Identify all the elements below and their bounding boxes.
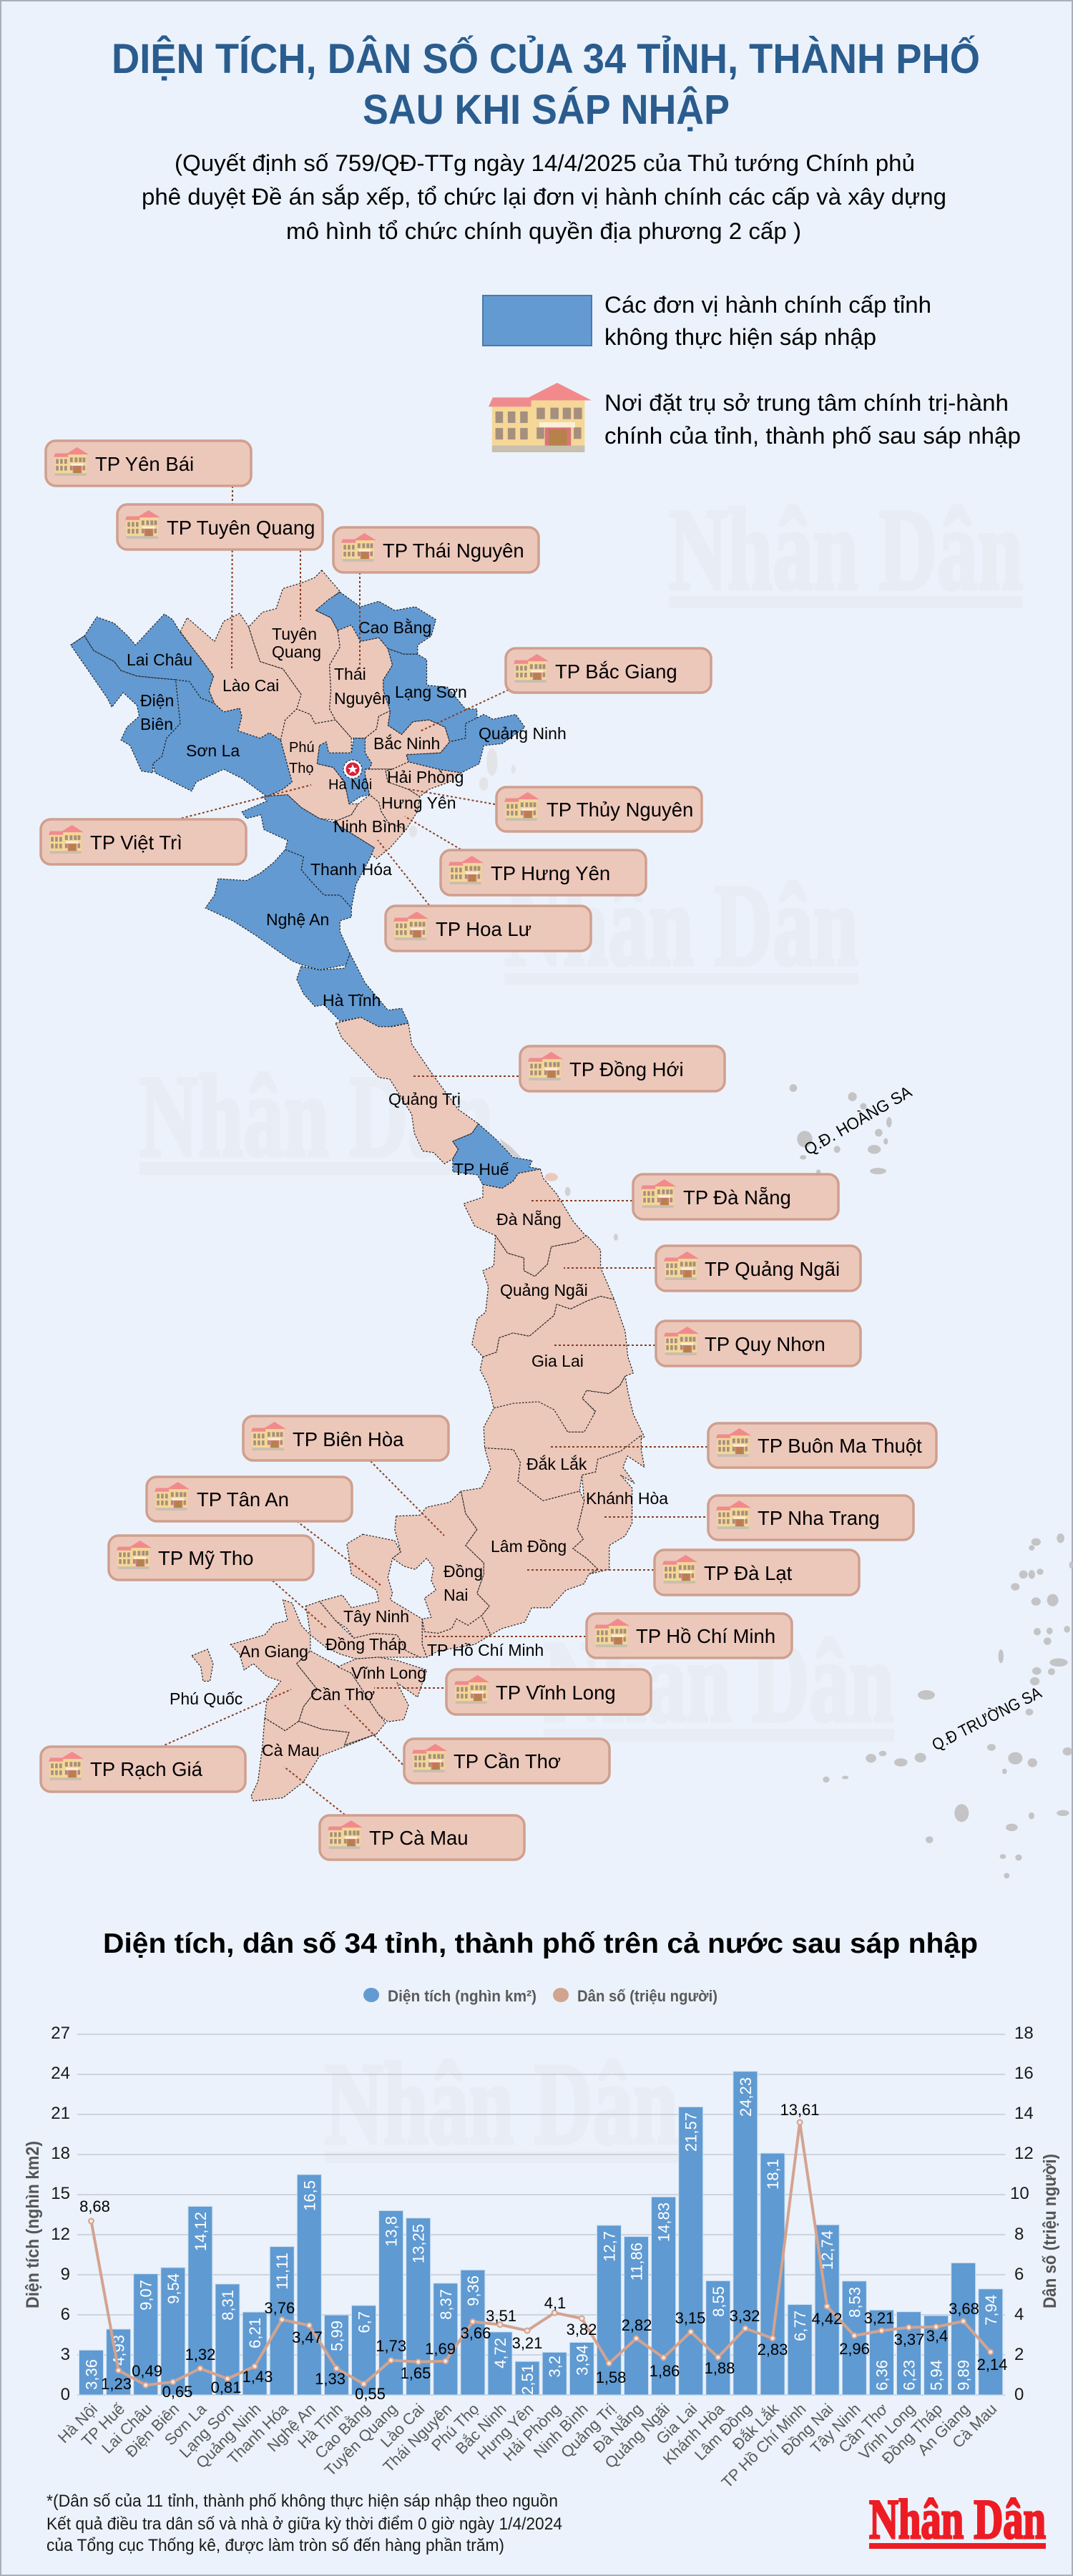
- callout: TP Biên Hòa: [243, 1416, 449, 1460]
- footnote: của Tổng cục Thống kê, được làm tròn số đến hàng phần trăm): [46, 2536, 504, 2555]
- island shading: Quảng Ninh: [409, 748, 516, 837]
- left axis ticks: 9: [61, 2265, 70, 2284]
- bar value labels: 14,83: [655, 2202, 673, 2242]
- watermarks: [139, 485, 1023, 2169]
- x axis labels: Lâm Đồng: [691, 2400, 755, 2464]
- callout: TP Hoa Lư: [386, 906, 591, 951]
- callout: TP Cà Mau: TP Cà Mau: [369, 1827, 469, 1849]
- x axis labels: Điện Biên: [122, 2400, 182, 2461]
- legend swatch: unmerged province: [483, 296, 592, 346]
- legend text: administrative centre: chính của tỉnh, thành phố sau sáp nhập: [604, 423, 1021, 449]
- population value labels: 3,21: [512, 2334, 542, 2352]
- callout: TP Quy Nhơn: [656, 1321, 861, 1366]
- map province labels: Khánh Hòa: [586, 1489, 668, 1508]
- left axis ticks: 18: [51, 2144, 70, 2163]
- map province labels: Tây Ninh: [343, 1607, 409, 1626]
- map province labels: Nghệ An: [266, 910, 329, 929]
- map province labels: Thanh Hóa: [310, 860, 392, 879]
- x axis labels: Hà Tĩnh: [294, 2400, 346, 2452]
- callout: TP Cà Mau: [320, 1815, 524, 1860]
- map province labels: Lai Châu: [127, 650, 192, 669]
- map: southern provinces: [192, 1376, 645, 1801]
- left axis ticks: [51, 2024, 70, 2404]
- callout: TP Yên Bái: TP Yên Bái: [95, 453, 194, 475]
- map province labels: Đà Nẵng: [496, 1209, 562, 1229]
- map: central provinces: [335, 1018, 633, 1432]
- x axis labels: Gia Lai: [652, 2400, 700, 2448]
- map province labels: Đồng: [444, 1562, 483, 1581]
- leader line: TP Thái Nguyên: [359, 572, 361, 669]
- legend text: unmerged province: [604, 292, 931, 350]
- callout: TP Rạch Giá: TP Rạch Giá: [90, 1758, 203, 1780]
- watermarks: Nhân Dân: [139, 1052, 494, 1181]
- callout: TP Thái Nguyên: TP Thái Nguyên: [383, 540, 524, 562]
- x axis labels: Ninh Bình: [530, 2400, 592, 2462]
- leader line: TP Quảng Ngãi: [564, 1267, 655, 1269]
- population value labels: 1,23: [101, 2375, 132, 2393]
- callout: TP Hưng Yên: TP Hưng Yên: [491, 862, 610, 884]
- population value labels: 3,47: [292, 2328, 323, 2346]
- leader line: TP Đà Lạt: [525, 1569, 654, 1571]
- legend text: administrative centre: [604, 390, 1021, 449]
- left axis title: Diện tích (nghìn km2): [23, 2141, 43, 2308]
- right axis ticks: 12: [1014, 2144, 1034, 2163]
- bar value labels: 24,23: [737, 2077, 755, 2117]
- callout: TP Mỹ Tho: [109, 1536, 313, 1580]
- callout: TP Hưng Yên: [441, 850, 646, 895]
- population value labels: 3,66: [461, 2324, 491, 2342]
- map province labels: Quảng Trị: [388, 1090, 461, 1108]
- right axis title: Dân số (triệu người): [1040, 2154, 1060, 2308]
- x axis labels: Thái Nguyên: [379, 2400, 455, 2476]
- map province labels: Sơn La: [186, 741, 240, 760]
- callout: TP Quảng Ngãi: TP Quảng Ngãi: [705, 1258, 840, 1280]
- callout: TP Mỹ Tho: TP Mỹ Tho: [158, 1547, 253, 1569]
- map province labels: Tuyên: [272, 625, 317, 643]
- map province labels: Lâm Đồng: [491, 1537, 567, 1556]
- subtitle: phê duyệt Đề án sắp xếp, tổ chức lại đơn vị hành chính các cấp và xây dựng: [142, 184, 946, 210]
- callout: TP Nha Trang: TP Nha Trang: [758, 1507, 880, 1529]
- map province labels: Hà Tĩnh: [323, 991, 381, 1010]
- watermarks: Nhân Dân: [504, 861, 858, 990]
- x axis labels: Quảng Ninh: [192, 2400, 265, 2472]
- map province labels: Biên: [140, 715, 173, 733]
- callout: TP Buôn Ma Thuột: [708, 1423, 936, 1468]
- leader line: TP Việt Trì: [177, 785, 311, 819]
- population value labels: 1,32: [185, 2346, 215, 2363]
- label: Q.Đ Trường Sa: Q.Đ TRƯỜNG SA: [929, 1683, 1044, 1754]
- right axis ticks: 2: [1014, 2345, 1024, 2364]
- map province labels: Quảng Ngãi: [500, 1281, 588, 1299]
- callout: TP Nha Trang: [708, 1496, 913, 1540]
- population value labels: 3,82: [567, 2321, 597, 2338]
- chart legend: [363, 1987, 717, 2005]
- bar value labels: 6,21: [246, 2318, 264, 2348]
- population value labels: 2,82: [622, 2316, 652, 2334]
- population value labels: 1,65: [401, 2364, 431, 2382]
- map province labels: Phú: [289, 740, 315, 756]
- bar value labels: 7,94: [982, 2295, 1000, 2326]
- title: SAU KHI SÁP NHẬP: [363, 87, 730, 133]
- bar value labels: 9,07: [137, 2280, 155, 2311]
- right axis ticks: 14: [1014, 2104, 1034, 2123]
- bar value labels: 9,89: [955, 2360, 973, 2391]
- islands near central coast: [499, 1138, 618, 1241]
- bar value labels: 14,12: [192, 2212, 210, 2251]
- population value labels: 3,37: [894, 2331, 924, 2348]
- population value labels: 3,15: [675, 2309, 705, 2327]
- bar value labels: 6,36: [873, 2360, 891, 2391]
- line markers: [89, 2119, 993, 2388]
- map province labels: Hà Nội: [328, 777, 372, 793]
- map province labels: Nguyên: [334, 689, 391, 708]
- x axis labels: Hải Phòng: [499, 2400, 564, 2464]
- x axis labels: Lạng Sơn: [176, 2400, 237, 2462]
- leader line: TP Đồng Hới: [413, 1075, 519, 1077]
- left axis ticks: 12: [51, 2225, 70, 2244]
- legend text: unmerged province: không thực hiện sáp nhập: [604, 324, 876, 350]
- x axis labels: Đồng Tháp: [878, 2400, 946, 2467]
- bar value labels: 12,7: [600, 2231, 618, 2262]
- bar value labels: 6,7: [355, 2311, 373, 2333]
- leader line: TP Cần Thơ: [345, 1705, 403, 1765]
- subtitle: mô hình tổ chức chính quyền địa phương 2 cấp ): [286, 218, 801, 244]
- leader line: TP Nha Trang: [603, 1516, 705, 1518]
- chart legend: Dân số (triệu người): [577, 1987, 717, 2005]
- map: northern provinces: [71, 570, 525, 1027]
- right axis ticks: [1010, 2024, 1034, 2404]
- callout: TP Yên Bái: [46, 441, 251, 486]
- bar value labels: 12,74: [818, 2230, 836, 2270]
- right axis ticks: 6: [1014, 2265, 1024, 2284]
- left axis ticks: 15: [51, 2184, 70, 2203]
- right axis ticks: 10: [1010, 2184, 1029, 2203]
- population value labels: 0,49: [132, 2362, 162, 2380]
- population value labels: 8,68: [79, 2197, 110, 2215]
- callout: TP Buôn Ma Thuột: TP Buôn Ma Thuột: [758, 1435, 922, 1457]
- population value labels: 1,33: [315, 2370, 346, 2388]
- map province labels: Phú Quốc: [170, 1689, 242, 1708]
- callout: TP Hoa Lư: TP Hoa Lư: [436, 918, 531, 940]
- callout: TP Hồ Chí Minh: [587, 1614, 792, 1658]
- population value labels: 0,65: [162, 2383, 192, 2401]
- leader line: TP Biên Hòa: [371, 1461, 444, 1536]
- leader line: TP Buôn Ma Thuột: [549, 1446, 707, 1448]
- callout: TP Tân An: [147, 1477, 352, 1521]
- x axis labels: TP Hồ Chí Minh: [718, 2400, 810, 2492]
- watermarks: Nhân Dân: [325, 2039, 678, 2169]
- x axis labels: Thanh Hóa: [224, 2399, 292, 2468]
- population value labels: 1,88: [705, 2359, 735, 2377]
- callout: TP Đà Lạt: [655, 1550, 859, 1595]
- leader line: TP Rạch Giá: [161, 1689, 291, 1747]
- x axis labels: An Giang: [914, 2400, 973, 2459]
- callout: TP Đà Nẵng: TP Đà Nẵng: [683, 1186, 791, 1209]
- title: [112, 36, 980, 133]
- population value labels: 1,69: [425, 2340, 456, 2358]
- line: population: [92, 2122, 991, 2385]
- callout: TP Quy Nhơn: TP Quy Nhơn: [705, 1333, 825, 1355]
- legend text: unmerged province: Các đơn vị hành chính cấp tỉnh: [604, 292, 931, 318]
- x axis labels: Cao Bằng: [311, 2400, 373, 2462]
- subtitle: (Quyết định số 759/QĐ-TTg ngày 14/4/2025 của Thủ tướng Chính phủ: [175, 150, 915, 176]
- bar value labels: 13,25: [410, 2224, 428, 2263]
- x axis labels: Vĩnh Long: [855, 2400, 918, 2463]
- callout: TP Vĩnh Long: [446, 1669, 651, 1714]
- x axis labels: Lào Cai: [377, 2400, 428, 2451]
- map province labels: Đồng Tháp: [325, 1635, 406, 1654]
- x axis labels: Cà Mau: [949, 2400, 1000, 2451]
- callout: TP Thủy Nguyên: TP Thủy Nguyên: [547, 799, 693, 821]
- bar value labels: 6,77: [791, 2311, 809, 2341]
- bar value labels: 11,11: [273, 2253, 291, 2290]
- bar value labels: 3,94: [573, 2345, 591, 2376]
- chart title: Diện tích, dân số 34 tỉnh, thành phố trên cả nước sau sáp nhập: [103, 1928, 978, 1959]
- x axis labels: Quảng Trị: [557, 2400, 619, 2462]
- map province labels: Lạng Sơn: [395, 683, 467, 701]
- bar value labels: 8,37: [437, 2289, 455, 2320]
- population value labels: 2,14: [977, 2356, 1007, 2373]
- marker: Hà Nội capital star: [343, 760, 362, 779]
- map province labels: Vĩnh Long: [351, 1664, 426, 1682]
- legend text: administrative centre: Nơi đặt trụ sở trung tâm chính trị-hành: [604, 390, 1009, 416]
- chart legend: Diện tích (nghìn km²): [388, 1987, 536, 2005]
- x axis labels: Đồng Nai: [778, 2400, 837, 2459]
- x axis labels: Tây Ninh: [807, 2400, 864, 2457]
- map province labels: TP Huế: [454, 1160, 509, 1179]
- bar value labels: 5,94: [928, 2360, 946, 2391]
- map province labels: Quang: [272, 643, 321, 661]
- footnote: Kết quả điều tra dân số và nhà ở giữa kỳ thời điểm 0 giờ ngày 1/4/2024: [46, 2514, 562, 2534]
- bar value labels: [83, 2077, 1000, 2395]
- population value labels: 3,68: [949, 2300, 979, 2318]
- population value labels: 0,55: [355, 2385, 386, 2403]
- map province labels: Lào Cai: [222, 676, 279, 695]
- map province labels: Thái: [334, 665, 366, 683]
- leader line: TP Vĩnh Long: [374, 1687, 444, 1689]
- map province labels: Hải Phòng: [387, 768, 464, 786]
- callout: TP Cần Thơ: [404, 1739, 609, 1783]
- bar value labels: 18,1: [764, 2159, 782, 2190]
- x axis labels: Sơn La: [161, 2399, 210, 2449]
- left axis ticks: 24: [51, 2064, 70, 2083]
- map province labels: Quảng Ninh: [479, 724, 567, 743]
- watermarks: Nhân Dân: [544, 1617, 894, 1747]
- leader line: TP Thủy Nguyên: [409, 789, 495, 804]
- bar value labels: 4,72: [491, 2338, 509, 2368]
- leader line: TP Hồ Chí Minh: [424, 1636, 586, 1637]
- leader line: TP Mỹ Tho: [273, 1581, 326, 1628]
- population value labels: 1,73: [376, 2337, 406, 2355]
- callout: TP Quảng Ngãi: [656, 1246, 861, 1291]
- bar value labels: 11,86: [628, 2243, 645, 2280]
- x axis labels: Nghệ An: [263, 2400, 319, 2455]
- callout: TP Đà Lạt: TP Đà Lạt: [704, 1562, 793, 1584]
- bar value labels: 8,31: [219, 2290, 237, 2321]
- callout: TP Hồ Chí Minh: TP Hồ Chí Minh: [636, 1625, 775, 1647]
- map province labels: Bắc Ninh: [373, 734, 440, 753]
- callout: TP Tuyên Quang: [117, 504, 323, 550]
- footnote: *(Dân số của 11 tỉnh, thành phố không thực hiện sáp nhập theo nguồn: [46, 2492, 558, 2511]
- x axis labels: Đắk Lắk: [729, 2399, 783, 2454]
- population value labels: 2,96: [839, 2340, 870, 2358]
- population value labels: 3,76: [264, 2299, 295, 2317]
- leader line: TP Hoa Lư: [378, 840, 429, 905]
- leader line: TP Đà Nẵng: [531, 1200, 632, 1201]
- callout: TP Đà Nẵng: [633, 1174, 838, 1219]
- islands: Trường Sa: [823, 1533, 1073, 1878]
- right axis ticks: 0: [1014, 2385, 1024, 2404]
- bar value labels: 8,55: [710, 2286, 727, 2317]
- title: DIỆN TÍCH, DÂN SỐ CỦA 34 TỈNH, THÀNH PHỐ: [112, 36, 980, 82]
- map province labels: Gia Lai: [531, 1352, 584, 1370]
- subtitle: [142, 150, 946, 244]
- bar value labels: 3,2: [546, 2356, 564, 2378]
- x axis labels: Cần Thơ: [835, 2400, 891, 2456]
- map province labels: Hưng Yên: [381, 794, 456, 812]
- population value labels: 1,86: [650, 2362, 680, 2380]
- population value labels: [79, 2101, 1007, 2403]
- callout: TP Rạch Giá: [41, 1747, 245, 1792]
- bars: area: [79, 2072, 1003, 2395]
- x axis labels: Hà Nội: [54, 2400, 101, 2446]
- population value labels: 3,4: [926, 2327, 948, 2345]
- population value labels: 2,83: [758, 2341, 788, 2358]
- callout: TP Tuyên Quang: TP Tuyên Quang: [167, 517, 315, 539]
- bar value labels: 8,53: [846, 2287, 863, 2318]
- right axis ticks: 4: [1014, 2305, 1024, 2324]
- bar value labels: 3,36: [83, 2359, 100, 2390]
- callout: TP Cần Thơ: TP Cần Thơ: [454, 1750, 561, 1772]
- bar value labels: 5,99: [328, 2321, 346, 2351]
- population value labels: 3,32: [730, 2307, 760, 2325]
- callout: TP Thủy Nguyên: [496, 787, 702, 831]
- chart: area bars and population line: [23, 2024, 1060, 2492]
- x axis labels: Bắc Ninh: [452, 2400, 510, 2458]
- population value labels: 1,58: [596, 2368, 626, 2386]
- leader line: TP Cà Mau: [284, 1767, 345, 1815]
- bar value labels: 6,23: [900, 2360, 918, 2391]
- leader line: TP Bắc Giang: [420, 690, 509, 731]
- bar value labels: 13,8: [383, 2216, 401, 2247]
- callout: TP Đồng Hới: [520, 1046, 725, 1091]
- footnote: [46, 2492, 562, 2555]
- leader line: TP Tuyên Quang: [300, 550, 301, 620]
- x axis labels: Đà Nẵng: [589, 2400, 646, 2457]
- x axis labels: Lai Châu: [98, 2400, 155, 2457]
- population value labels: 0,81: [211, 2379, 241, 2396]
- right axis ticks: 16: [1014, 2064, 1034, 2083]
- left axis ticks: 21: [51, 2104, 70, 2123]
- legend: map: [483, 292, 1021, 452]
- left axis ticks: 0: [61, 2385, 70, 2404]
- map province labels: Thọ: [289, 761, 313, 776]
- map province labels: Ninh Bình: [333, 817, 406, 836]
- right axis ticks: 18: [1014, 2024, 1034, 2043]
- callout: TP Biên Hòa: TP Biên Hòa: [293, 1428, 404, 1450]
- bar value labels: 9,54: [165, 2273, 182, 2304]
- left axis ticks: 27: [51, 2024, 70, 2043]
- label: Q.Đ. Hoàng Sa: Q.Đ. HOÀNG SA: [801, 1082, 915, 1158]
- map province labels: Cần Thơ: [310, 1685, 375, 1704]
- callout: TP Thái Nguyên: [333, 527, 539, 572]
- map province labels: An Giang: [240, 1642, 308, 1661]
- x axis labels: Tuyên Quang: [321, 2400, 401, 2479]
- population value labels: 1,43: [242, 2368, 273, 2386]
- callout: TP Việt Trì: [41, 819, 246, 864]
- callout: TP Việt Trì: TP Việt Trì: [90, 831, 182, 854]
- x axis labels: TP Huế: [78, 2400, 128, 2450]
- bar value labels: 4,93: [110, 2335, 128, 2366]
- map province labels: Nai: [444, 1586, 469, 1604]
- leader line: TP Quy Nhơn: [554, 1345, 655, 1346]
- x axis labels: Hưng Yên: [474, 2400, 537, 2463]
- right axis ticks: 8: [1014, 2225, 1024, 2244]
- bar value labels: 2,51: [519, 2364, 536, 2395]
- leader line: TP Tân An: [297, 1521, 381, 1586]
- callout: TP Đồng Hới: TP Đồng Hới: [569, 1058, 684, 1080]
- left axis ticks: 3: [61, 2345, 70, 2364]
- callout: TP Bắc Giang: TP Bắc Giang: [555, 660, 677, 683]
- x axis labels: Phú Thọ: [428, 2400, 482, 2454]
- map province labels: TP Hồ Chí Minh: [427, 1641, 544, 1659]
- bar value labels: 21,57: [682, 2112, 700, 2152]
- population value labels: 4,1: [544, 2294, 566, 2312]
- population value labels: 3,21: [864, 2309, 894, 2327]
- map province labels: [127, 618, 668, 1760]
- bar value labels: 9,36: [464, 2275, 482, 2306]
- map province labels: Đắk Lắk: [526, 1455, 587, 1473]
- callout: TP Tân An: TP Tân An: [197, 1488, 289, 1511]
- islands: Hoàng Sa: [790, 1084, 892, 1174]
- leader line: TP Hưng Yên: [405, 816, 461, 849]
- map province labels: Điện: [140, 691, 174, 710]
- map province labels: Cà Mau: [262, 1741, 320, 1760]
- icon: building: [489, 383, 592, 452]
- x axis labels: [54, 2399, 1000, 2492]
- x axis labels: Khánh Hòa: [660, 2399, 728, 2468]
- callout: TP Bắc Giang: [506, 648, 711, 693]
- callout: TP Vĩnh Long: TP Vĩnh Long: [496, 1682, 616, 1704]
- population value labels: 3,51: [486, 2307, 516, 2325]
- left axis ticks: 6: [61, 2305, 70, 2324]
- population value labels: 4,42: [812, 2310, 842, 2328]
- map province labels: Cao Bằng: [358, 618, 431, 637]
- population value labels: 13,61: [780, 2101, 820, 2119]
- x axis labels: Quảng Ngãi: [601, 2400, 673, 2472]
- bar value labels: 16,5: [300, 2180, 318, 2211]
